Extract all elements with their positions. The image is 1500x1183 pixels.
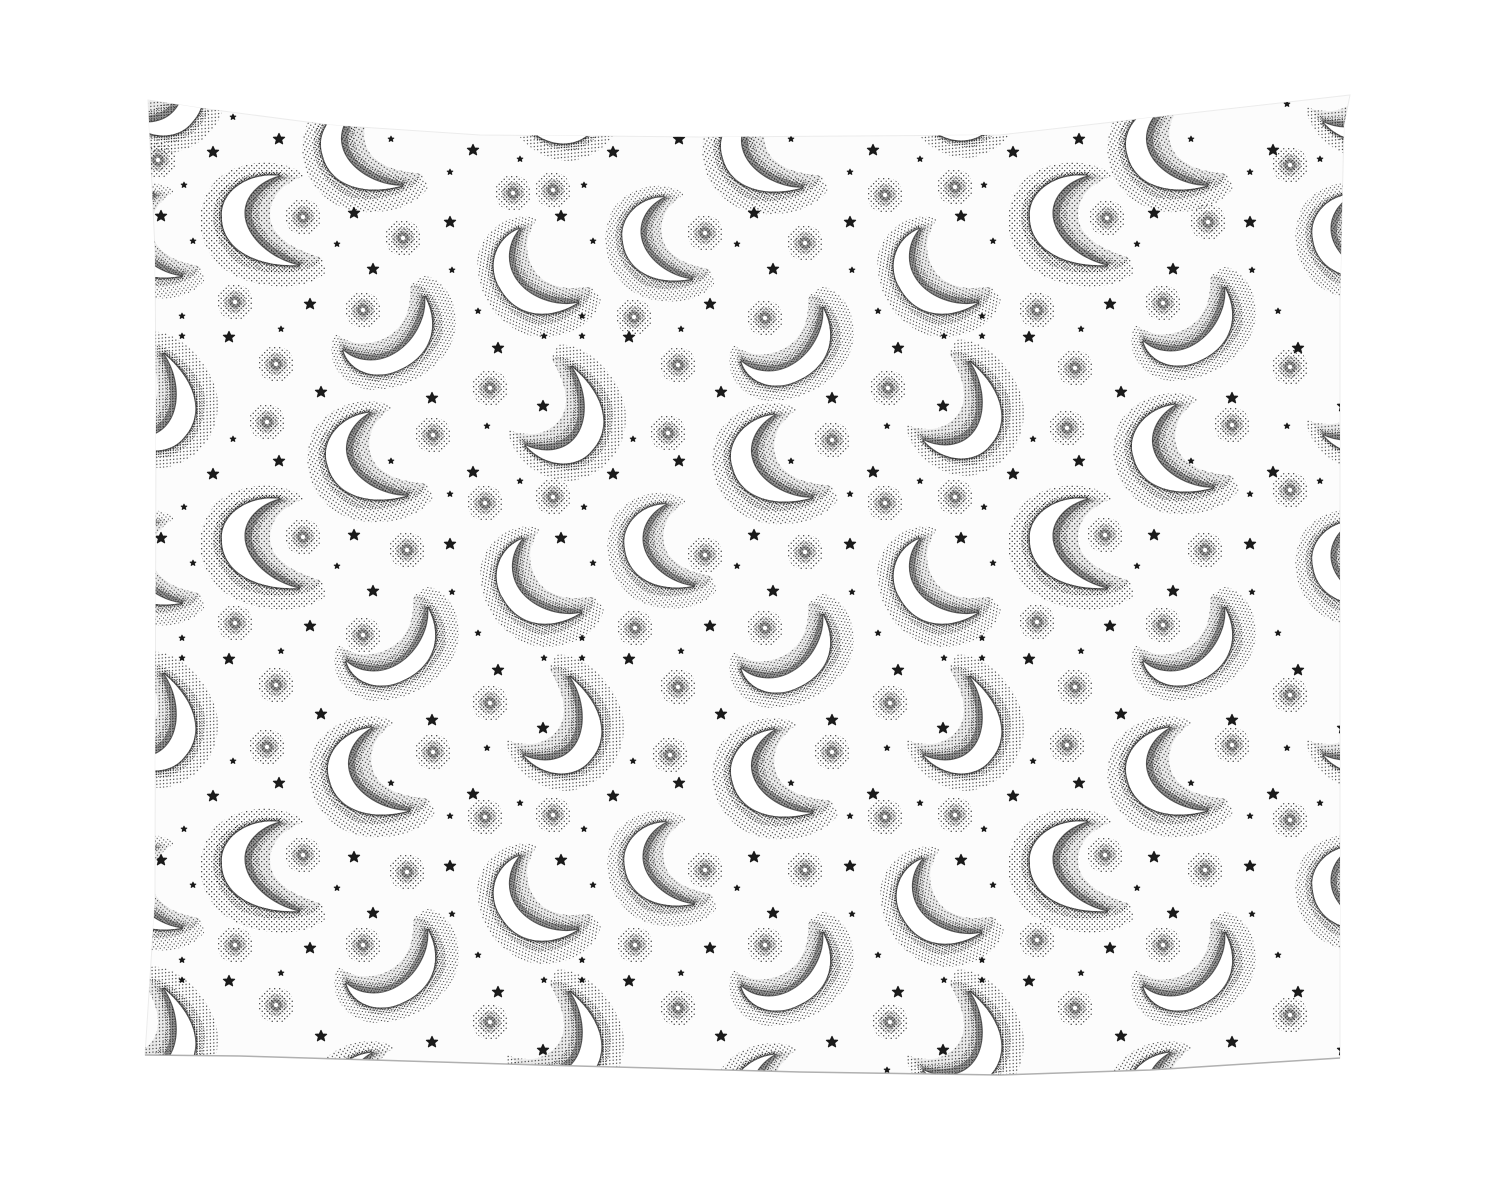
repeating pattern [145,100,1348,1074]
scattered stars [145,102,1341,1073]
tapestry [144,94,1350,1076]
crescent moons opening right [88,163,1407,959]
crescent moons opening left [145,100,1348,1074]
cloth panel [145,95,1350,1075]
crescent moons tilted further up-right [458,199,1011,990]
bottom hem shadow [145,1055,1340,1075]
crescent moons tilted up-right, upper rows [291,80,1242,1179]
dotted starbursts [140,142,1308,1040]
soft-focus pattern layer [145,100,1348,1074]
crescent moons opening upper left [316,260,1276,1044]
